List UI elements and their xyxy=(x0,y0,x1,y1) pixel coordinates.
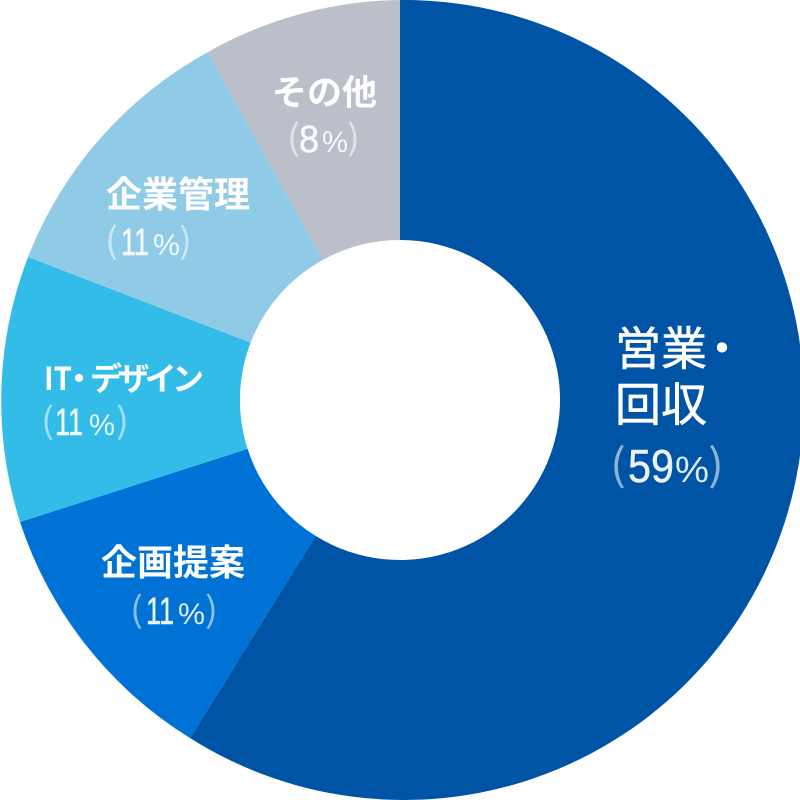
label: sales and collection xyxy=(610,313,745,493)
label value: 11%: ) xyxy=(179,213,192,264)
segment: planning proposal 11% xyxy=(20,449,316,738)
label value: 11%: 11 xyxy=(146,591,174,633)
label value: 11%: ( xyxy=(130,582,143,633)
label value: 11%: 11 xyxy=(55,402,83,444)
label: IT and design: デザイン xyxy=(90,354,204,400)
label value: 8%: ( xyxy=(287,110,300,161)
label value: 11%: 11 xyxy=(121,222,149,264)
label value: 59%: 59 xyxy=(628,440,674,492)
label: corporate management: 企業管理 xyxy=(106,166,250,218)
label value: 11% xyxy=(105,213,192,264)
label: IT and design: ・ xyxy=(63,354,95,400)
label: planning proposal xyxy=(101,534,245,633)
label: IT and design xyxy=(41,354,204,444)
label value: 11%: % xyxy=(178,598,205,631)
label value: 59%: % xyxy=(675,449,709,490)
label: other: その他 xyxy=(272,65,377,116)
segment: corporate management 11% xyxy=(28,52,323,343)
label value: 8%: 8 xyxy=(299,119,319,161)
label value: 11%: ) xyxy=(205,582,218,633)
label value: 59%: ( xyxy=(610,431,626,493)
label: corporate management xyxy=(105,166,250,264)
label: planning proposal: 企画提案 xyxy=(101,534,245,586)
label: other xyxy=(272,65,377,161)
label value: 59%: ) xyxy=(708,431,724,493)
label: sales and collection: 回収 xyxy=(615,369,707,435)
segment: other 8% xyxy=(208,0,400,260)
label value: 11%: ( xyxy=(105,213,118,264)
label value: 8%: % xyxy=(322,126,348,159)
segment: IT and design 11% xyxy=(1,257,251,522)
label value: 11%: % xyxy=(89,409,115,442)
label value: 11% xyxy=(130,582,218,633)
label value: 8% xyxy=(287,110,360,161)
label value: 11%: ( xyxy=(41,393,54,444)
label value: 59% xyxy=(610,431,724,493)
label value: 11%: ) xyxy=(116,393,129,444)
label: IT and design: IT xyxy=(44,354,72,400)
label value: 11% xyxy=(41,393,129,444)
segment: sales and collection 59% xyxy=(190,0,800,800)
label value: 8%: ) xyxy=(347,110,360,161)
label: sales and collection: 営業・ xyxy=(615,313,745,379)
label value: 11%: % xyxy=(153,229,180,262)
